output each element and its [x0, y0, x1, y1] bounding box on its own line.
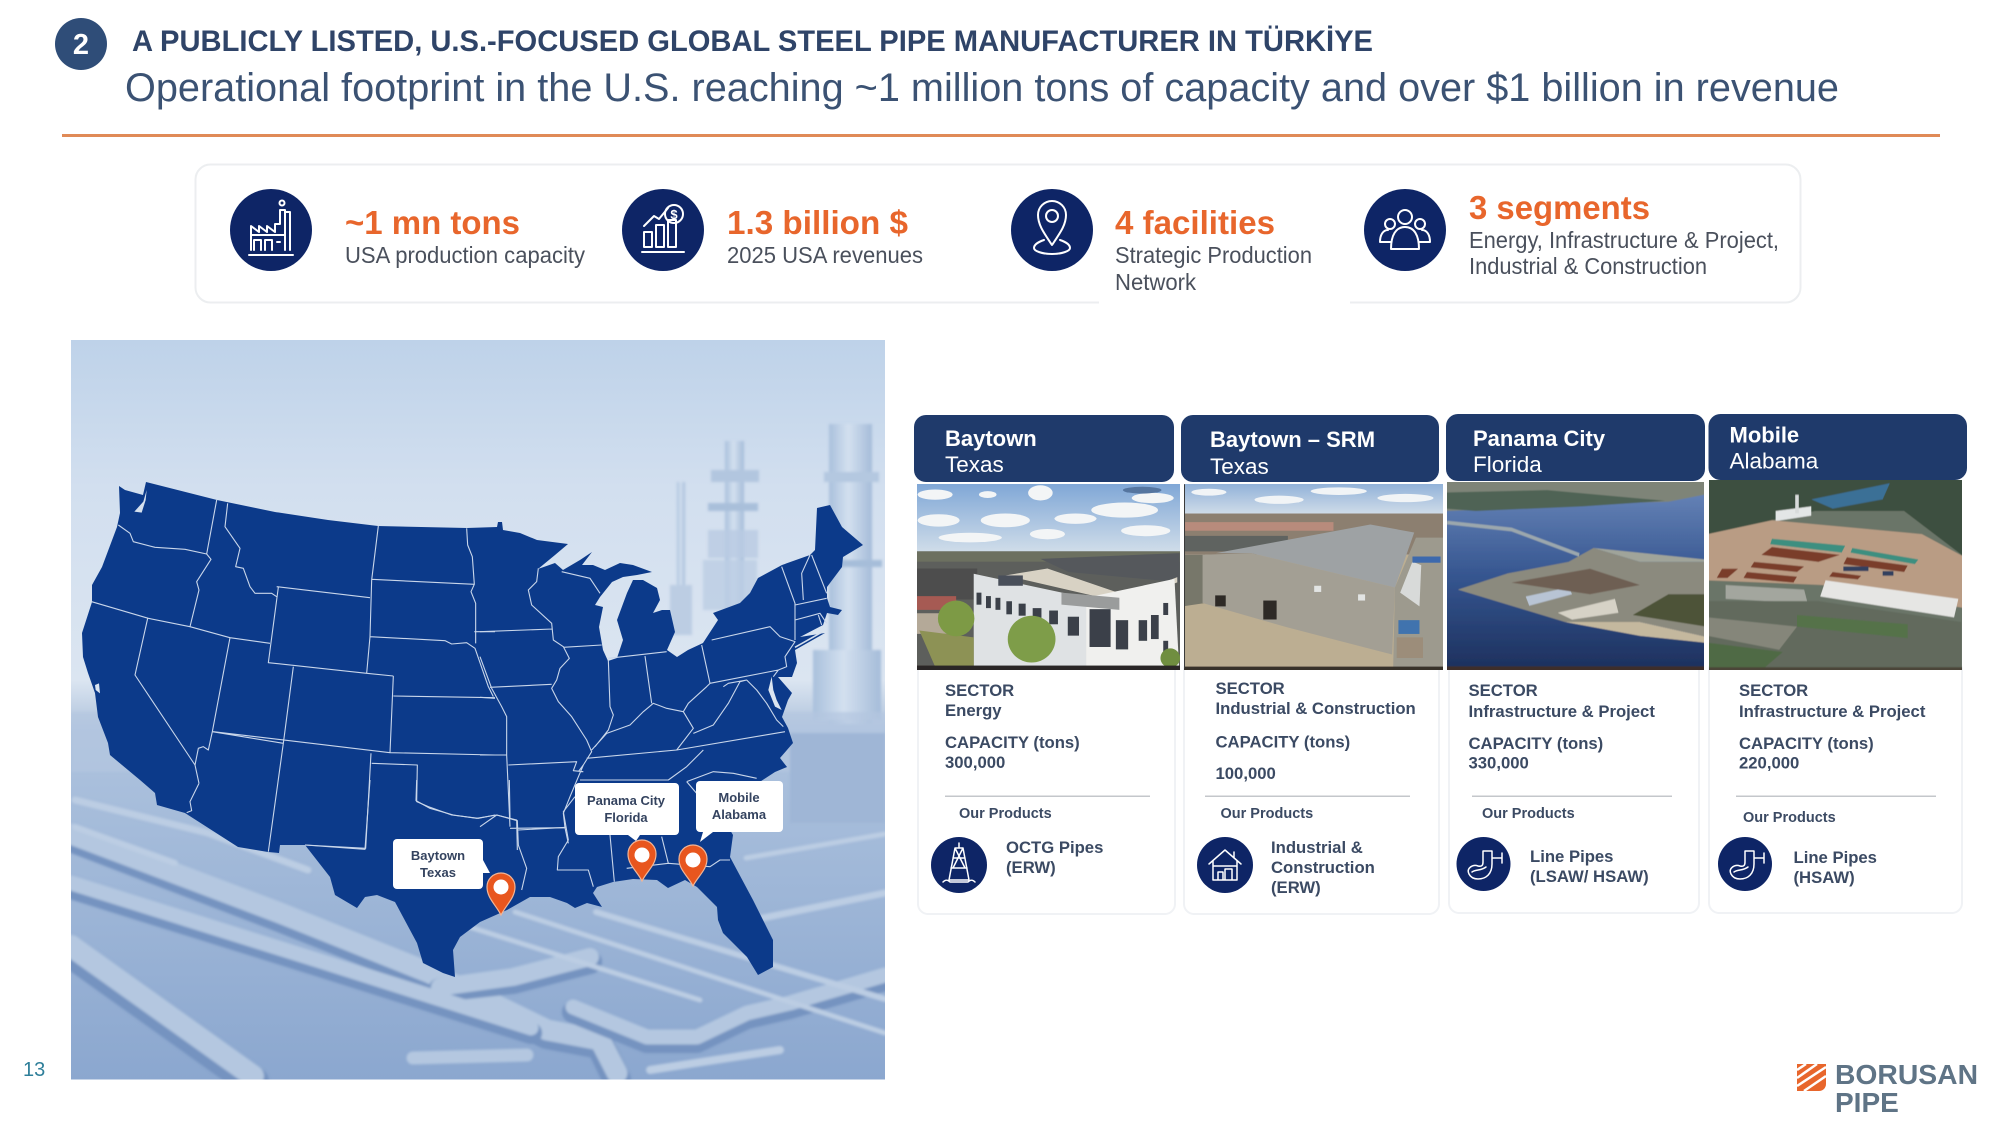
product name: (ERW) — [1271, 878, 1321, 897]
details: 100,000 — [1216, 764, 1276, 783]
panel: U.S. map — [71, 340, 885, 1082]
details: 220,000 — [1739, 754, 1799, 772]
icon: oil derrick — [931, 837, 987, 893]
details — [1468, 681, 1655, 772]
callout: Mobile Alabama: Alabama — [712, 807, 767, 822]
details: SECTOR — [1216, 679, 1285, 698]
header: Texas — [1210, 454, 1269, 479]
details — [1739, 681, 1926, 772]
callout: Panama City Florida: Florida — [604, 810, 648, 825]
logo: Borusan Pipe — [1797, 1059, 1978, 1118]
product name: Line Pipes — [1530, 847, 1613, 866]
header: Florida — [1473, 452, 1542, 477]
panel: Baytown facility card — [914, 415, 1184, 914]
photo: Panama City port — [1445, 481, 1706, 673]
header — [914, 415, 1174, 482]
orange divider — [62, 134, 1940, 137]
details: 330,000 — [1468, 754, 1529, 772]
callout: Panama City Florida: Panama City — [587, 793, 666, 808]
logo: Borusan Pipe: PIPE — [1835, 1087, 1899, 1118]
figure: facilities — [1011, 189, 1312, 295]
callout: Baytown Texas — [393, 839, 490, 889]
header — [1446, 414, 1705, 481]
products label: Our Products — [1743, 810, 1836, 826]
photo: Baytown SRM plant — [1183, 483, 1446, 671]
header: Alabama — [1730, 448, 1819, 474]
header: Panama City — [1473, 426, 1606, 451]
product name: OCTG Pipes — [1006, 838, 1103, 857]
details: 300,000 — [945, 753, 1005, 772]
figure: capacity — [230, 189, 585, 271]
callout: Mobile Alabama: Mobile — [718, 790, 760, 805]
product name — [1006, 838, 1103, 877]
products label: Our Products — [1482, 806, 1575, 822]
details: SECTOR — [1739, 681, 1808, 700]
details: CAPACITY (tons) — [1739, 734, 1874, 753]
panel: Baytown SRM facility card — [1181, 415, 1446, 914]
caption: Strategic Production — [1115, 242, 1312, 268]
product name — [1794, 848, 1877, 887]
subtitle: Operational footprint in the U.S. reaching ~1 million tons of capacity and over $1 billion in revenue — [125, 66, 1839, 110]
product name — [1530, 847, 1649, 886]
icon: location pin — [1011, 189, 1093, 271]
figure: revenues — [622, 189, 923, 271]
icon: house — [1197, 837, 1253, 893]
product name: Construction — [1271, 858, 1375, 877]
figure: segments: Industrial & Construction — [1469, 253, 1707, 279]
value: ~1 mn tons — [345, 204, 520, 241]
value: 1.3 billion $ — [727, 204, 908, 241]
product name: (LSAW/ HSAW) — [1530, 867, 1649, 886]
state borders — [92, 490, 495, 852]
icon: factory — [230, 189, 312, 271]
caption: Energy, Infrastructure & Project, — [1469, 227, 1779, 253]
products label: Our Products — [1220, 806, 1313, 822]
header: Baytown – SRM — [1210, 427, 1375, 452]
details: CAPACITY (tons) — [1216, 732, 1350, 752]
product name: Line Pipes — [1794, 848, 1877, 867]
header: Texas — [945, 452, 1004, 477]
pin: Panama City — [628, 840, 656, 881]
icon: people — [1364, 189, 1446, 271]
details: Energy — [945, 701, 1002, 720]
map: contiguous United States — [82, 482, 863, 977]
details — [1216, 679, 1416, 783]
caption: 2025 USA revenues — [727, 242, 923, 268]
photo: Baytown office — [914, 483, 1184, 671]
value: 4 facilities — [1115, 204, 1275, 241]
figure: segments — [1364, 189, 1779, 279]
icon: pipe — [1718, 837, 1772, 891]
products label: Our Products — [959, 806, 1052, 822]
header — [1708, 414, 1967, 480]
icon: chart with dollar — [622, 189, 704, 271]
details: Infrastructure & Project — [1739, 702, 1926, 721]
section number badge — [55, 18, 107, 70]
pin: Mobile — [679, 845, 707, 886]
details: Infrastructure & Project — [1468, 702, 1655, 721]
details: CAPACITY (tons) — [945, 733, 1080, 752]
value: 3 segments — [1469, 189, 1650, 226]
figure: facilities: Network — [1115, 269, 1196, 295]
callout: Mobile Alabama — [696, 781, 783, 842]
details: SECTOR — [1468, 681, 1538, 700]
panel: key figures — [196, 164, 1800, 308]
caption: USA production capacity — [345, 242, 585, 268]
product name — [1271, 838, 1375, 897]
icon: chart with dollar: $ — [670, 207, 678, 222]
heading: A PUBLICLY LISTED, U.S.-FOCUSED GLOBAL STEEL PIPE MANUFACTURER IN TÜRKİYE — [132, 25, 1373, 58]
header: Baytown — [945, 426, 1037, 451]
panel: Mobile facility card — [1708, 414, 1967, 913]
panel: Panama City facility card — [1445, 414, 1706, 913]
page number: 13 — [23, 1059, 45, 1081]
product name: Industrial & — [1271, 838, 1363, 857]
details: SECTOR — [945, 681, 1014, 700]
callout: Baytown Texas: Baytown — [411, 848, 465, 863]
details: CAPACITY (tons) — [1468, 734, 1603, 753]
logo mark — [1797, 1064, 1826, 1091]
icon: pipe — [1456, 837, 1510, 891]
details: Industrial & Construction — [1216, 699, 1416, 718]
logo wordmark: BORUSAN — [1835, 1059, 1978, 1090]
product name: (ERW) — [1006, 858, 1056, 877]
photo: Mobile plant — [1708, 479, 1965, 673]
map background: refinery and pipelines — [71, 340, 885, 1082]
callout: Panama City Florida — [575, 783, 679, 841]
pin: Baytown — [487, 873, 515, 915]
header: Mobile — [1730, 422, 1799, 448]
section number badge: 2 — [73, 29, 89, 61]
header — [1181, 415, 1439, 482]
callout: Baytown Texas: Texas — [420, 865, 456, 880]
details — [945, 681, 1080, 772]
product name: (HSAW) — [1794, 868, 1855, 887]
